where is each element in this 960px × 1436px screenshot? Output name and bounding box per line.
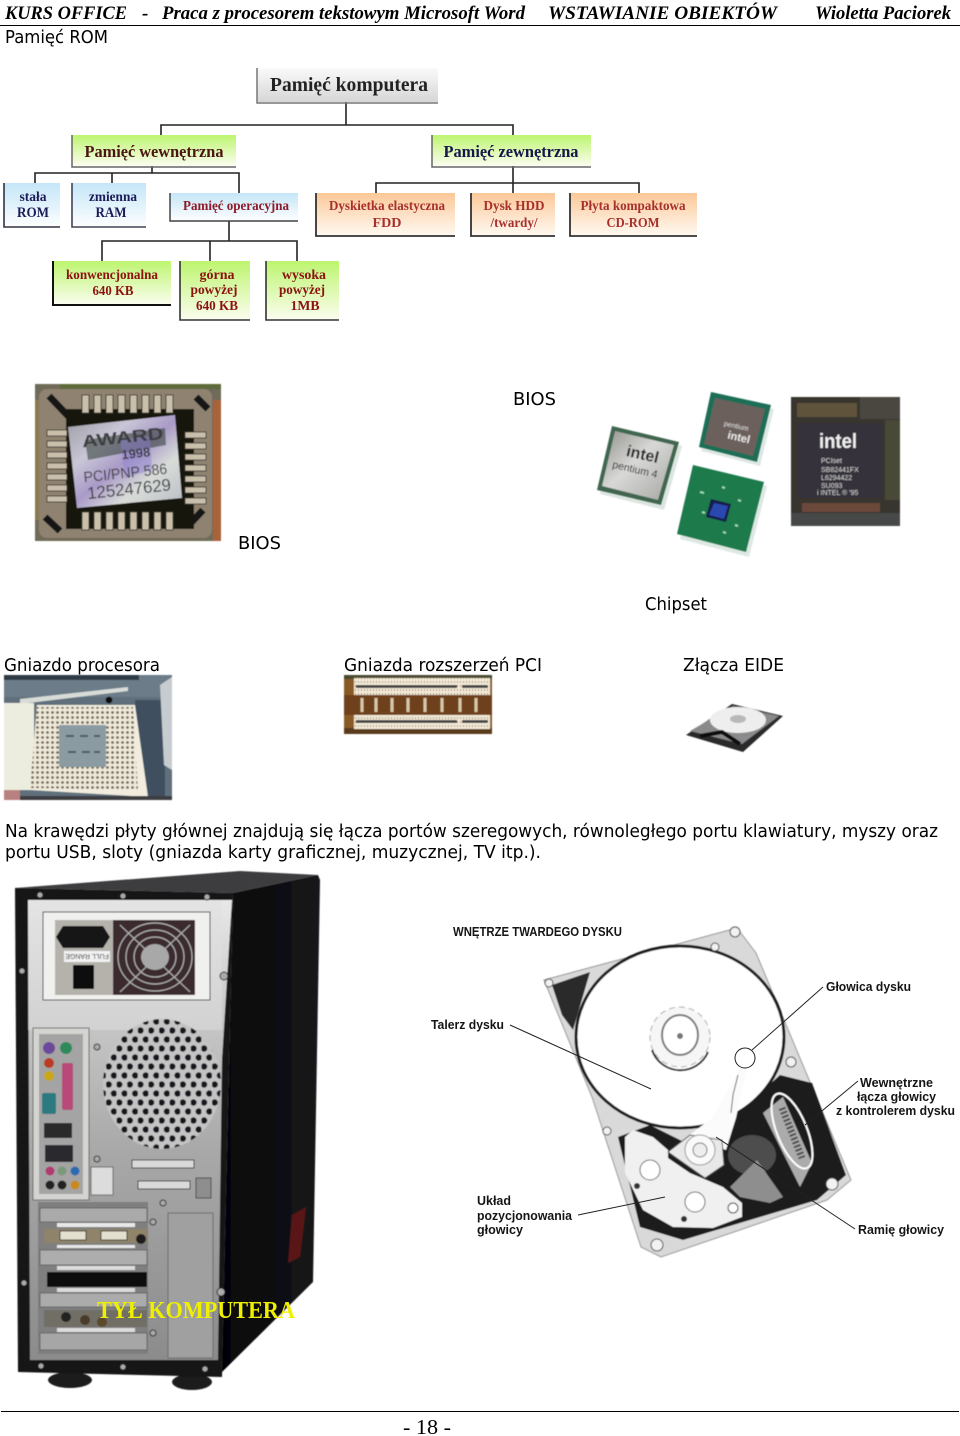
chip label text: PCI/PNP 586 [83, 461, 168, 486]
box: wysoka powyżej 1MB: 1MB [290, 299, 320, 314]
chip label text: AWARD [81, 424, 164, 451]
box: stała ROM [4, 183, 60, 227]
tower feet [48, 1372, 212, 1390]
box: konwencjonalna 640 KB: konwencjonalna [66, 268, 158, 283]
chip: top package: intel [726, 430, 751, 446]
box: stała ROM: ROM [17, 205, 49, 221]
photo: PCI expansion slots [344, 675, 492, 734]
diagram: interior of hard disk [431, 924, 955, 1257]
page header: Praca z procesorem tekstowym Microsoft Word [161, 3, 525, 24]
chip label text: 125247629 [86, 475, 172, 503]
label: Talerz dysku: Talerz dysku [431, 1017, 504, 1032]
box: wysoka powyżej 1MB [266, 261, 339, 320]
box: Pamięć zewnętrzna [432, 135, 591, 167]
label: Układ pozycjonowania głowicy: Układ [477, 1193, 511, 1208]
label: Układ pozycjonowania głowicy [477, 1193, 573, 1237]
box: zmienna RAM: RAM [96, 205, 126, 221]
label: Głowica dysku: Głowica dysku [826, 979, 911, 994]
photo: small hard disk [686, 704, 783, 752]
box: Dysk HDD /twardy/: Dysk HDD [484, 199, 544, 214]
box: Dyskietka elastyczna FDD: FDD [372, 216, 402, 231]
photo: Intel chip on board: SU093 [821, 483, 843, 490]
chip pins [47, 395, 206, 530]
box: Pamięć komputera: Pamięć komputera [270, 74, 428, 96]
fan grille [103, 1019, 221, 1149]
power supply unit [43, 912, 210, 1000]
box: zmienna RAM: zmienna [89, 190, 137, 205]
box: Płyta kompaktowa CD-ROM: Płyta kompaktowa [580, 199, 686, 214]
photo: chipset chips [597, 392, 900, 557]
box: zmienna RAM [72, 183, 146, 227]
actuator plate [625, 1130, 742, 1228]
title: WNĘTRZE TWARDEGO DYSKU: WNĘTRZE TWARDEGO DYSKU [453, 924, 622, 939]
label: Ramię głowicy: Ramię głowicy [858, 1222, 945, 1237]
sticker [91, 1167, 113, 1195]
page header: - [142, 3, 148, 24]
platter [576, 946, 784, 1128]
box: stała ROM: stała [20, 190, 46, 205]
tower top face [15, 871, 318, 893]
power socket [56, 926, 110, 948]
box: górna powyżej 640 KB: powyżej [190, 283, 238, 298]
chip: top package [699, 392, 774, 466]
box: Płyta kompaktowa CD-ROM [570, 193, 697, 236]
chip label text: 1998 [121, 444, 151, 462]
metal back panel [28, 900, 232, 1360]
label: Wewnętrzne łącza głowicy z kontrolerem dysku: Wewnętrzne [860, 1075, 933, 1090]
side knockout plate [168, 1213, 213, 1358]
label: FULL RANGE [64, 951, 110, 962]
caption: Złącza EIDE: Złącza EIDE [683, 655, 784, 676]
caption: TYŁ KOMPUTERA: TYŁ KOMPUTERA [97, 1298, 296, 1324]
frame screws [19, 892, 228, 1372]
expansion slots [38, 1202, 148, 1354]
box: Dyskietka elastyczna FDD: Dyskietka elastyczna [329, 199, 445, 214]
box: górna powyżej 640 KB [180, 261, 250, 320]
tower side panel [222, 875, 320, 1372]
caption: Chipset: Chipset [645, 594, 707, 615]
caption: Gniazda rozszerzeń PCI: Gniazda rozszerzeń PCI [344, 655, 542, 676]
psu fan [113, 920, 195, 995]
page header: Wioletta Paciorek [815, 3, 951, 24]
photo: Intel chip on board: intel [819, 431, 857, 453]
box: Pamięć zewnętrzna: Pamięć zewnętrzna [444, 142, 579, 161]
label: Wewnętrzne łącza głowicy z kontrolerem dysku: łącza głowicy [857, 1089, 937, 1104]
page header: KURS OFFICE [4, 3, 127, 24]
photo: back of computer tower [15, 871, 320, 1390]
callout lines [510, 987, 858, 1229]
photo: Intel chip on board [791, 397, 900, 526]
photo: Intel chip on board: PCIset [821, 458, 842, 465]
page header [0, 2, 960, 26]
caption: BIOS (left): BIOS [238, 533, 281, 554]
box: Pamięć operacyjna: Pamięć operacyjna [183, 199, 289, 214]
box: Pamięć wewnętrzna: Pamięć wewnętrzna [84, 142, 224, 161]
label: FULL RANGE: FULL RANGE [65, 952, 109, 959]
disk photo [544, 927, 851, 1257]
box: Dyskietka elastyczna FDD [316, 193, 455, 236]
I/O port panel [33, 1028, 89, 1200]
box: Dysk HDD /twardy/ [471, 193, 555, 236]
box: górna powyżej 640 KB: 640 KB [196, 299, 238, 314]
photo: Intel chip on board: L6294422 [821, 475, 852, 482]
org chart: computer memory hierarchy [4, 68, 697, 320]
knockouts [132, 1160, 194, 1189]
paragraph: port description: portu USB, sloty (gniazda karty graficznej, muzycznej, TV itp.). [5, 842, 541, 863]
flex connector [763, 1088, 821, 1187]
actuator bracket [730, 1160, 783, 1203]
voice coil [728, 1135, 776, 1175]
box: Pamięć komputera [257, 68, 438, 103]
power switch [73, 965, 94, 989]
label: Układ pozycjonowania głowicy: głowicy [477, 1222, 524, 1237]
page header: WSTAWIANIE OBIEKTÓW [548, 2, 778, 24]
box: Pamięć wewnętrzna [72, 135, 236, 167]
box: Pamięć operacyjna [170, 193, 298, 221]
paragraph: port description [5, 821, 938, 863]
chip: Pentium 4: intel [625, 443, 660, 467]
chip: green package [677, 465, 767, 557]
box: wysoka powyżej 1MB: wysoka [282, 268, 326, 283]
label: Układ pozycjonowania głowicy: pozycjonowania [477, 1208, 573, 1223]
arm hub [668, 1135, 724, 1178]
photo: BIOS chip [35, 384, 221, 541]
caption: Gniazdo procesora: Gniazdo procesora [4, 655, 160, 676]
label: Wewnętrzne łącza głowicy z kontrolerem dysku: z kontrolerem dysku [836, 1103, 955, 1118]
dark drive bay [618, 1075, 846, 1240]
box: konwencjonalna 640 KB [53, 261, 171, 305]
mount screws [545, 927, 838, 1251]
chip: Pentium 4 [597, 426, 682, 510]
photo: Intel chip on board: SB82441FX [821, 467, 859, 474]
head arm [688, 1067, 747, 1150]
label: Wewnętrzne łącza głowicy z kontrolerem dysku [836, 1075, 955, 1118]
chip label text [79, 424, 172, 503]
chip: Pentium 4: pentium 4 [611, 459, 659, 481]
photo: Intel chip on board: i INTEL ® '95 [817, 489, 858, 497]
disk chassis [544, 928, 851, 1257]
tower body photo [15, 871, 320, 1390]
heading: Pamięć ROM: Pamięć ROM [5, 27, 108, 48]
box: górna powyżej 640 KB: górna [200, 268, 234, 283]
caption: BIOS (top): BIOS [513, 389, 556, 410]
box: Dysk HDD /twardy/: /twardy/ [490, 216, 539, 231]
tower back frame [15, 888, 233, 1377]
box: konwencjonalna 640 KB: 640 KB [92, 284, 134, 299]
chip: top package: pentium [723, 421, 749, 433]
box: Płyta kompaktowa CD-ROM: CD-ROM [606, 216, 660, 231]
box: wysoka powyżej 1MB: powyżej [279, 283, 325, 298]
photo: CPU socket [4, 675, 172, 800]
